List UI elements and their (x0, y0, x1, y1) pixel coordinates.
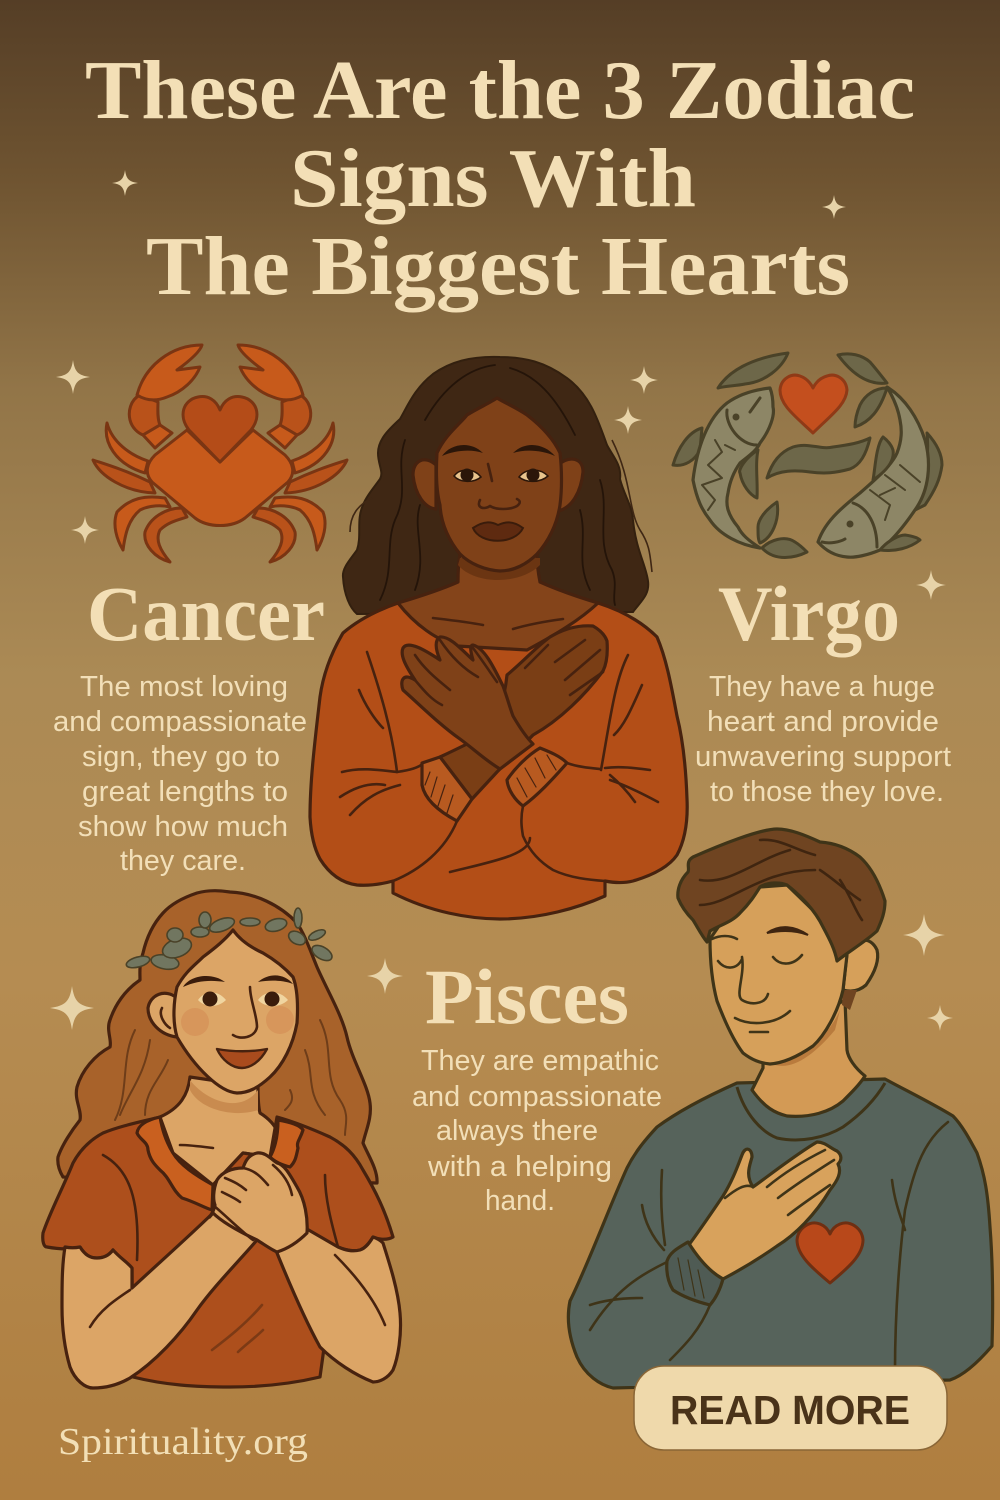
forearm: left sleeve (393, 763, 457, 881)
text block: Cancer description: sign, they go to (82, 741, 280, 773)
text block: Virgo description: unwavering support (695, 741, 951, 773)
text block: Pisces description: with a helping (427, 1151, 612, 1183)
text block: Virgo description: heart and provide (707, 706, 939, 738)
sweater (568, 1079, 993, 1388)
neck and chest (160, 1077, 278, 1185)
title: These Are the 3 Zodiac (85, 44, 915, 137)
heading: Cancer: Cancer (87, 570, 325, 657)
text block: Pisces description: always there (436, 1115, 598, 1147)
hair (678, 829, 885, 961)
heart (797, 1223, 863, 1283)
ears (413, 459, 583, 511)
heading: Pisces: Pisces (425, 953, 629, 1040)
sleeve folds (340, 652, 658, 872)
button: read more: READ MORE (670, 1387, 910, 1433)
face (436, 398, 562, 571)
front hand (402, 637, 533, 769)
text block: Cancer description (53, 671, 307, 877)
button: read more (634, 1366, 947, 1450)
title: Signs With (290, 132, 696, 225)
flower crown (125, 908, 335, 971)
arms (62, 1213, 257, 1388)
text block: Pisces description: They are empathic (421, 1045, 659, 1077)
text block: Virgo description (695, 671, 951, 808)
face features (181, 1008, 209, 1036)
text block: Cancer description: show how much (78, 811, 288, 843)
ear (843, 940, 878, 991)
text block: Pisces description: and compassionate (412, 1081, 662, 1113)
sleeve folds (590, 1122, 948, 1370)
face features (712, 936, 802, 1032)
illustration: girl with flower crown (43, 891, 401, 1388)
collar (737, 1083, 885, 1140)
text block: Cancer description: great lengths to (82, 776, 288, 808)
title (85, 44, 915, 313)
hands (210, 1153, 307, 1252)
hair (343, 357, 648, 614)
illustration: man with hand on heart (568, 829, 993, 1388)
hair (58, 891, 377, 1183)
illustration: woman with crossed hands (310, 357, 687, 919)
text block: Pisces description: hand. (485, 1185, 555, 1217)
right sleeve (521, 763, 605, 881)
heading: Virgo: Virgo (718, 570, 900, 657)
icon: cancer crab with heart (93, 345, 347, 562)
text block: Cancer description: they care. (120, 845, 246, 877)
title: The Biggest Hearts (146, 220, 850, 313)
text block: Cancer description: The most loving (80, 671, 288, 703)
neck and chest (398, 554, 598, 650)
back hair under ear (695, 920, 857, 1010)
cuff (667, 1242, 723, 1305)
cuffs (422, 757, 472, 821)
icon: pisces fish and heart (673, 353, 942, 558)
face (710, 885, 847, 1064)
sweater body (310, 603, 687, 919)
neck (752, 1000, 865, 1116)
logo: Spirituality.org: Spirituality.org (58, 1421, 308, 1463)
text block: Pisces description (412, 1045, 662, 1217)
decorative sparkles (50, 170, 953, 1031)
dress (43, 1117, 393, 1387)
text block: Virgo description: to those they love. (710, 776, 944, 808)
face features (442, 445, 555, 456)
text block: Cancer description: and compassionate (53, 706, 307, 738)
back hand (440, 626, 607, 799)
ear (148, 993, 177, 1037)
face (174, 930, 298, 1093)
hand (688, 1142, 841, 1279)
collar (137, 1117, 213, 1210)
text block: Virgo description: They have a huge (709, 671, 935, 703)
